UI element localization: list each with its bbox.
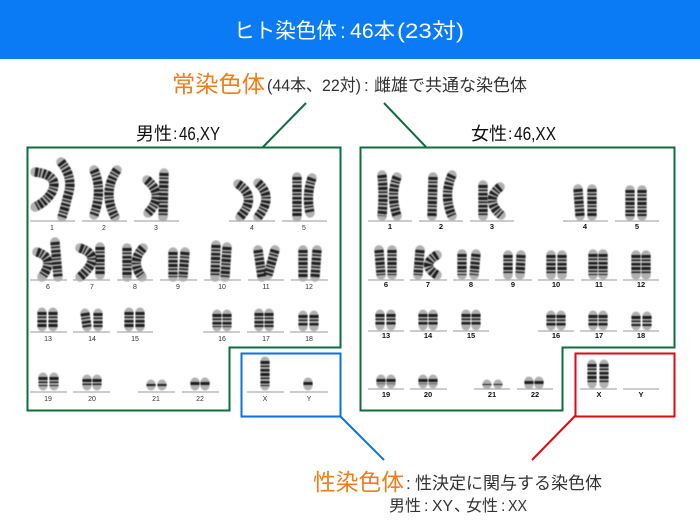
male sex chromosomes X and Y: X — [263, 396, 268, 403]
connector: autosomes to male — [263, 103, 306, 147]
heading: autosomes: : — [364, 76, 369, 95]
label: male: 男性 — [136, 124, 172, 144]
panel: female sex chromosomes outline — [576, 354, 674, 416]
female karyotype row 1: 5 — [635, 222, 639, 231]
female karyotype row 2: 6 — [384, 280, 388, 289]
male karyotype row 3: 17 — [262, 336, 270, 343]
panel: male autosomes outline — [28, 148, 340, 410]
female karyotype row 3: 17 — [595, 331, 603, 340]
female karyotype row 2: 10 — [552, 280, 560, 289]
female karyotype row 2: 8 — [469, 280, 473, 289]
male karyotype row 2: 7 — [90, 284, 94, 291]
female karyotype row 1 — [368, 175, 659, 231]
male karyotype row 2: 10 — [218, 284, 226, 291]
female karyotype row 4: 19 — [382, 390, 390, 399]
female karyotype row 4 — [368, 379, 553, 399]
male karyotype row 1 — [30, 162, 327, 232]
title: 46本 — [350, 20, 395, 43]
female karyotype row 2: 11 — [595, 280, 603, 289]
female karyotype row 4: 20 — [424, 390, 432, 399]
female karyotype row 2: 12 — [637, 280, 645, 289]
text: male and female sex chromosome types — [389, 497, 527, 515]
female karyotype row 3: 18 — [637, 331, 645, 340]
heading: autosomes: (44本、22対) — [267, 76, 361, 95]
female sex chromosomes X and Y: Y — [638, 390, 644, 399]
heading: autosomes: 雌雄で共通な染色体 — [374, 76, 527, 95]
female karyotype row 1: 3 — [490, 222, 494, 231]
text: male and female sex chromosome types: 女性 — [466, 497, 498, 515]
female karyotype row 4: 22 — [531, 390, 539, 399]
female karyotype row 4: 21 — [488, 390, 496, 399]
male karyotype row 3: 18 — [305, 336, 313, 343]
male karyotype row 2: 11 — [262, 284, 270, 291]
male karyotype row 1: 3 — [154, 225, 158, 232]
text: male and female sex chromosome types: 男性 — [389, 497, 421, 515]
heading: autosomes — [172, 71, 527, 97]
label: male — [136, 124, 220, 144]
male karyotype row 1: 5 — [302, 225, 306, 232]
connector: male sex chromosomes — [340, 416, 384, 460]
label: male: : — [173, 126, 177, 143]
panel: male sex chromosomes outline — [242, 354, 340, 416]
heading: sex chromosomes: : — [406, 474, 411, 493]
male karyotype row 1: 2 — [102, 225, 106, 232]
female karyotype row 3: 14 — [424, 331, 433, 340]
title: ヒト染色体 — [234, 20, 337, 43]
male karyotype row 4: 22 — [196, 396, 204, 403]
connector: autosomes to female — [384, 103, 426, 147]
connector: female sex chromosomes — [532, 416, 575, 460]
female karyotype row 2: 9 — [511, 280, 515, 289]
male karyotype row 3: 14 — [88, 336, 96, 343]
text: male and female sex chromosome types: : — [501, 498, 505, 515]
male karyotype row 1: 1 — [50, 225, 54, 232]
female karyotype row 2: 7 — [426, 280, 430, 289]
male karyotype row 2: 12 — [305, 284, 313, 291]
male sex chromosomes X and Y: Y — [307, 396, 312, 403]
heading: sex chromosomes — [313, 469, 602, 495]
label: female: 女性 — [471, 124, 507, 144]
text: male and female sex chromosome types: 、 — [454, 498, 470, 515]
text: male and female sex chromosome types: XX — [508, 498, 527, 515]
male karyotype row 1: 4 — [250, 225, 254, 232]
label: female — [471, 124, 556, 144]
label: female: 46,XX — [514, 124, 556, 144]
label: female: : — [508, 126, 512, 143]
title — [234, 20, 464, 43]
male karyotype row 2: 9 — [176, 284, 180, 291]
text: male and female sex chromosome types: : — [424, 498, 428, 515]
male karyotype row 2 — [30, 242, 328, 291]
panel: female autosomes outline — [360, 148, 674, 410]
male karyotype row 2: 8 — [133, 284, 137, 291]
title: (23対) — [397, 20, 464, 43]
male karyotype row 3: 15 — [131, 336, 139, 343]
male karyotype row 4 — [30, 377, 219, 403]
male karyotype row 3: 16 — [218, 336, 226, 343]
title: : — [340, 20, 346, 43]
male karyotype row 2: 6 — [46, 284, 50, 291]
female sex chromosomes X and Y — [580, 364, 659, 399]
female karyotype row 3: 15 — [467, 331, 475, 340]
male karyotype row 4: 19 — [44, 396, 52, 403]
female karyotype row 2 — [368, 250, 659, 289]
female karyotype row 3 — [368, 314, 659, 340]
heading: sex chromosomes: 性決定に関与する染色体 — [415, 474, 602, 493]
male sex chromosomes X and Y — [247, 361, 328, 403]
header bar — [0, 0, 700, 59]
male karyotype row 4: 21 — [152, 396, 160, 403]
male karyotype row 3 — [30, 312, 328, 343]
male karyotype row 4: 20 — [88, 396, 96, 403]
label: male: 46,XY — [179, 124, 220, 144]
female sex chromosomes X and Y: X — [596, 390, 602, 399]
female karyotype row 1: 2 — [439, 222, 443, 231]
female karyotype row 1: 4 — [583, 222, 588, 231]
male karyotype row 3: 13 — [44, 336, 52, 343]
heading: autosomes: 常染色体 — [172, 71, 265, 97]
female karyotype row 3: 16 — [552, 331, 560, 340]
text: male and female sex chromosome types: XY — [432, 498, 453, 515]
female karyotype row 3: 13 — [382, 331, 390, 340]
heading: sex chromosomes: 性染色体 — [313, 469, 404, 495]
female karyotype row 1: 1 — [388, 222, 392, 231]
